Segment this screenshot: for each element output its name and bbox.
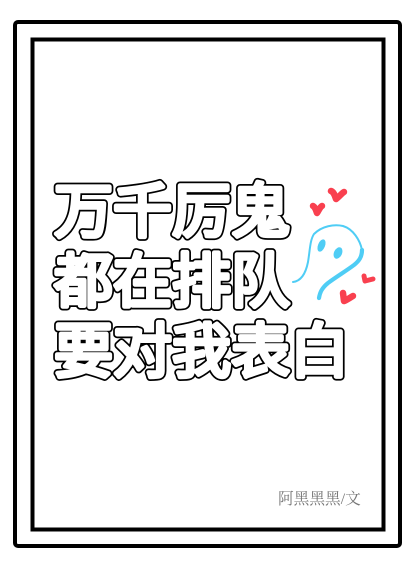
icon: ghost: [293, 225, 362, 298]
icon: hearts: [313, 191, 373, 301]
title outline: [54, 179, 349, 385]
author: 阿黑黑黑/文: [278, 490, 361, 508]
title outline: 都在排队: [54, 249, 290, 315]
heart right: [364, 276, 373, 281]
title fill: [54, 179, 349, 385]
title fill: 都在排队: [54, 249, 290, 315]
inner frame: [32, 40, 384, 530]
title fill: 万千厉鬼: [54, 179, 290, 245]
title outline: 要对我表白: [54, 319, 349, 385]
title: [54, 179, 349, 385]
heart top: [331, 191, 344, 199]
title outline: 万千厉鬼: [54, 179, 290, 245]
ghost left eye: [316, 238, 327, 253]
heart left: [313, 206, 322, 213]
ghost left side: [293, 225, 362, 282]
ghost right side: [319, 250, 362, 298]
title fill: 要对我表白: [54, 319, 349, 385]
ghost right eye: [332, 246, 344, 260]
heart bottom: [343, 293, 353, 301]
